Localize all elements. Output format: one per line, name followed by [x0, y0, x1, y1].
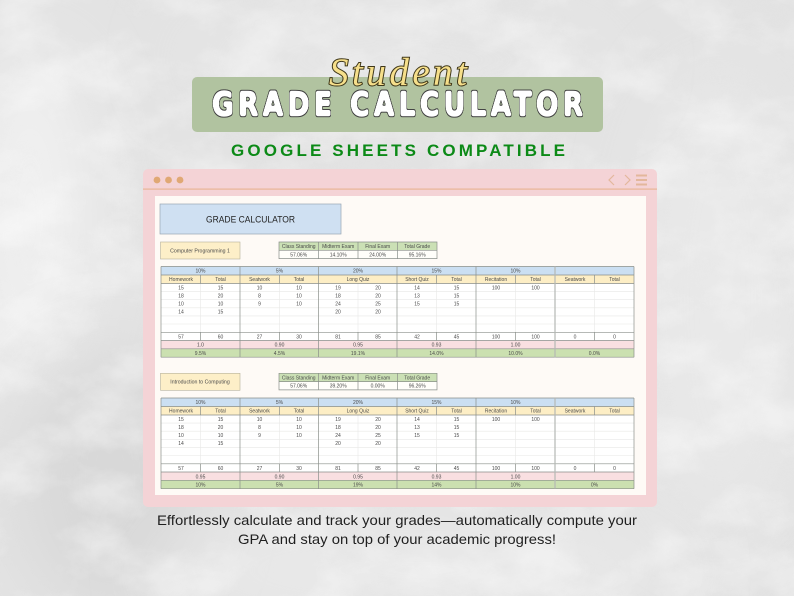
column headers	[169, 409, 620, 415]
score rows: 15	[414, 433, 420, 439]
totals row: 60	[218, 466, 223, 472]
weighted result row: 19%	[353, 483, 364, 489]
score rows: 15	[218, 417, 223, 423]
column headers: Total	[609, 277, 620, 283]
column headers: Total	[215, 277, 226, 283]
score rows: 10	[296, 433, 302, 439]
column headers: Homework	[169, 277, 193, 283]
ratio row: 0.90	[275, 474, 285, 480]
column headers: Total	[294, 409, 304, 415]
score rows: 10	[257, 417, 262, 423]
column headers: Total	[451, 277, 462, 283]
score rows: 13	[414, 294, 420, 300]
weighted result row: 10%	[510, 483, 521, 489]
score rows: 20	[375, 294, 381, 300]
totals row: 0	[613, 334, 616, 340]
score rows: 10	[257, 286, 262, 292]
totals row: 100	[492, 334, 500, 340]
totals row: 81	[335, 466, 341, 472]
summary table: course 1: Midterm Exam	[322, 244, 354, 250]
score rows: 10	[296, 425, 302, 431]
summary table: course 1: Total Grade	[404, 244, 430, 250]
score rows: 15	[454, 302, 459, 308]
score rows: 10	[296, 417, 302, 423]
ratio row: 0.95	[353, 474, 363, 480]
score rows: 20	[375, 286, 381, 292]
weighted result row: 5%	[276, 483, 284, 489]
summary table: course 2: Total Grade	[404, 375, 430, 381]
column headers: Total	[530, 409, 541, 415]
column headers: Seatwork	[565, 409, 586, 415]
column headers: Long Quiz	[347, 277, 370, 283]
score rows: 15	[454, 417, 459, 423]
weights row: 15%	[431, 400, 442, 406]
score rows: 18	[335, 425, 341, 431]
score rows: 15	[178, 286, 184, 292]
icon: navigation chevrons and menu	[609, 175, 647, 185]
score rows: 10	[178, 302, 184, 308]
column headers: Recitation	[485, 277, 507, 283]
ratio row: 0.90	[275, 342, 285, 348]
weights row	[195, 400, 521, 406]
weighted result row: 19.1%	[351, 351, 366, 357]
summary table: course 1: Final Exam	[365, 244, 390, 250]
weights row: 10%	[195, 400, 206, 406]
grade table: course 1	[161, 266, 634, 357]
column headers: Total	[530, 277, 541, 283]
totals row: 30	[296, 466, 302, 472]
score rows: 14	[178, 310, 184, 316]
score rows: 10	[218, 302, 223, 308]
score rows: 10	[296, 294, 302, 300]
table bands	[161, 266, 634, 357]
score rows: 100	[531, 286, 540, 292]
totals row: 85	[375, 466, 381, 472]
score rows: 15	[454, 433, 459, 439]
ratio row: 0.95	[353, 342, 363, 348]
sheet title box: GRADE CALCULATOR	[206, 214, 295, 224]
score rows: 8	[258, 425, 261, 431]
weighted result row: 0.0%	[589, 351, 601, 357]
column headers: Long Quiz	[347, 409, 370, 415]
column headers: Total	[215, 409, 226, 415]
score rows: 25	[375, 433, 381, 439]
ratio row: 1.00	[511, 342, 521, 348]
sheet title box	[160, 204, 341, 234]
weighted result row: 0%	[591, 483, 599, 489]
totals row: 0	[574, 466, 577, 472]
score rows: 100	[492, 417, 500, 423]
totals row: 57	[178, 334, 184, 340]
subtitle: Google Sheets compatible: GOOGLE SHEETS COMPATIBLE	[231, 141, 565, 160]
score rows: 24	[335, 302, 341, 308]
totals row	[178, 334, 616, 340]
weighted result row: 14.0%	[429, 351, 444, 357]
summary table: course 2: 96.26%	[409, 384, 426, 390]
course label: Introduction to Computing	[160, 373, 240, 390]
weights row	[195, 269, 521, 275]
weights row: 5%	[276, 400, 284, 406]
summary table: course 2: Midterm Exam	[322, 375, 354, 381]
ratio row: 0.95	[196, 474, 206, 480]
score rows: 100	[492, 286, 500, 292]
column headers: Recitation	[485, 409, 507, 415]
summary table: course 1: 14.10%	[330, 252, 347, 258]
weighted result row: 9.5%	[195, 351, 207, 357]
title: Student: Student	[329, 51, 468, 94]
score rows: 14	[414, 417, 420, 423]
totals row: 27	[257, 466, 262, 472]
column headers: Seatwork	[249, 277, 270, 283]
score rows: 10	[218, 433, 223, 439]
score rows: 25	[375, 302, 381, 308]
score rows	[178, 417, 540, 447]
grade table: course 2	[161, 398, 634, 489]
column headers: Seatwork	[249, 409, 270, 415]
score rows: 20	[375, 310, 381, 316]
weighted result row: 10%	[195, 483, 206, 489]
score rows: 15	[218, 441, 223, 447]
score rows: 15	[454, 286, 459, 292]
title: Grade Calculator: GRADE CALCULATOR	[212, 86, 583, 124]
score rows: 19	[335, 417, 341, 423]
score rows: 15	[218, 310, 223, 316]
totals row: 85	[375, 334, 381, 340]
weights row: 5%	[276, 269, 284, 275]
column headers: Homework	[169, 409, 193, 415]
score rows: 10	[178, 433, 184, 439]
score rows: 100	[531, 417, 540, 423]
summary table: course 1: 95.16%	[409, 252, 426, 258]
score rows: 10	[296, 286, 302, 292]
totals row: 60	[218, 334, 223, 340]
score rows: 20	[335, 310, 341, 316]
title banner: green rounded bar	[192, 77, 603, 132]
summary table: course 2: Final Exam	[365, 375, 390, 381]
score rows: 15	[218, 286, 223, 292]
weighted result row	[195, 351, 601, 357]
course label: Computer Programming 1: Computer Programming 1	[170, 248, 230, 254]
totals row: 30	[296, 334, 302, 340]
score rows: 20	[375, 417, 381, 423]
weights row: 10%	[510, 269, 521, 275]
weighted result row	[195, 483, 599, 489]
weights row: 20%	[353, 269, 364, 275]
score rows: 15	[454, 294, 459, 300]
score rows: 18	[178, 425, 184, 431]
weights row: 15%	[431, 269, 442, 275]
table bands	[161, 398, 634, 489]
browser window frame	[143, 169, 657, 507]
summary table: course 2: 0.00%	[371, 384, 385, 390]
score rows: 8	[258, 294, 261, 300]
ratio row: 0.93	[432, 474, 442, 480]
totals row: 100	[531, 466, 540, 472]
totals row: 45	[454, 466, 459, 472]
score rows: 10	[296, 302, 302, 308]
weighted result row: 4.5%	[274, 351, 286, 357]
course label: Introduction to Computing: Introduction to Computing	[170, 380, 230, 386]
totals row: 27	[257, 334, 262, 340]
summary table: course 1: Class Standing	[282, 244, 316, 250]
score rows: 20	[218, 294, 223, 300]
column headers: Total	[451, 409, 462, 415]
score rows: 14	[414, 286, 420, 292]
column headers	[169, 277, 620, 283]
score rows: 9	[258, 433, 261, 439]
weights row: 20%	[353, 400, 364, 406]
score rows: 9	[258, 302, 261, 308]
weights row: 10%	[195, 269, 206, 275]
summary table: course 2: 39.20%	[330, 384, 347, 390]
score rows: 18	[335, 294, 341, 300]
score rows: 20	[375, 441, 381, 447]
score rows: 13	[414, 425, 420, 431]
weighted result row: 10.0%	[508, 351, 523, 357]
weighted result row: 14%	[431, 483, 442, 489]
totals row	[178, 466, 616, 472]
caption	[157, 512, 637, 547]
score rows: 18	[178, 294, 184, 300]
ratio row: 1.00	[511, 474, 521, 480]
totals row: 57	[178, 466, 184, 472]
weights row: 10%	[510, 400, 521, 406]
totals row: 0	[574, 334, 577, 340]
totals row: 45	[454, 334, 459, 340]
totals row: 42	[414, 334, 420, 340]
caption: Effortlessly calculate and track your grades—automatically compute your	[157, 512, 637, 528]
totals row: 81	[335, 334, 341, 340]
totals row: 42	[414, 466, 420, 472]
column headers: Short Quiz	[405, 277, 429, 283]
score rows	[178, 286, 540, 316]
score rows: 20	[218, 425, 223, 431]
summary table: course 1: 57.06%	[290, 252, 308, 258]
score rows: 19	[335, 286, 341, 292]
course label: Computer Programming 1	[160, 242, 240, 259]
ratio row: 1.0	[197, 342, 204, 348]
column headers: Short Quiz	[405, 409, 429, 415]
score rows: 20	[375, 425, 381, 431]
totals row: 0	[613, 466, 616, 472]
score rows: 15	[178, 417, 184, 423]
summary table: course 1	[279, 242, 437, 259]
score rows: 14	[178, 441, 184, 447]
column headers: Total	[609, 409, 620, 415]
ratio row: 0.93	[432, 342, 442, 348]
column headers: Seatwork	[565, 277, 586, 283]
ratio row	[197, 342, 521, 348]
summary table: course 2: 57.06%	[290, 384, 308, 390]
summary table: course 1: 24.00%	[369, 252, 387, 258]
window control dots	[154, 177, 183, 183]
caption: GPA and stay on top of your academic progress!	[238, 531, 556, 547]
totals row: 100	[492, 466, 500, 472]
totals row: 100	[531, 334, 540, 340]
score rows: 15	[414, 302, 420, 308]
score rows: 15	[454, 425, 459, 431]
score rows: 24	[335, 433, 341, 439]
summary table: course 2: Class Standing	[282, 375, 316, 381]
column headers: Total	[294, 277, 304, 283]
ratio row	[196, 474, 521, 480]
summary table: course 2	[279, 373, 437, 390]
score rows: 20	[335, 441, 341, 447]
